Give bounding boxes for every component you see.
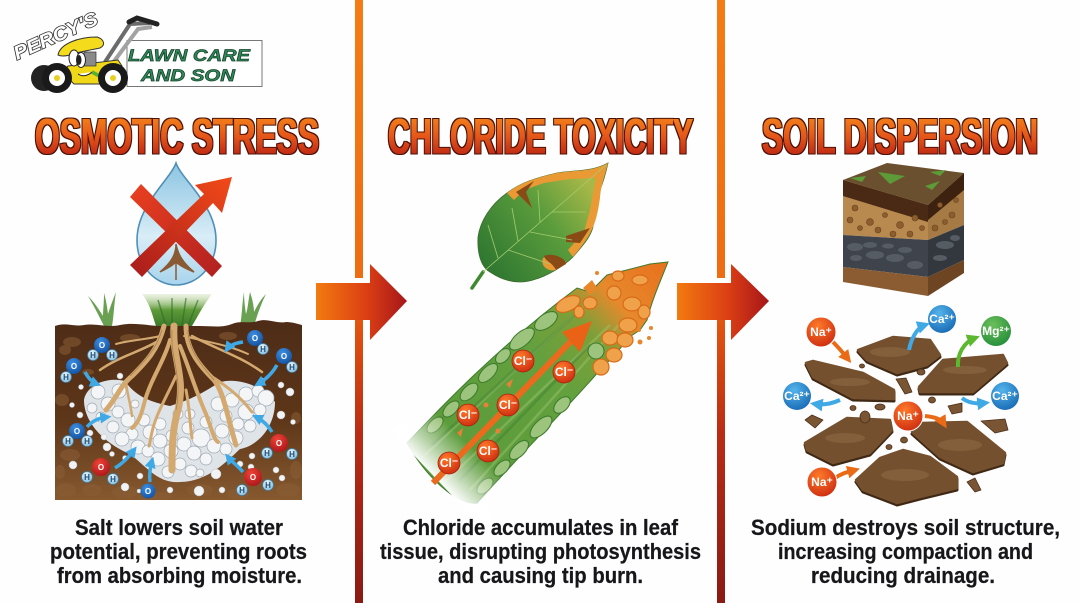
sodium ions: Na⁺	[810, 325, 832, 339]
icon: water drop	[137, 163, 216, 285]
ions	[783, 305, 1019, 497]
icon: crossed water drop with root and arrow	[130, 163, 232, 285]
soil block front face layers	[843, 180, 928, 240]
text block: chloride toxicity: and causing tip burn.	[438, 563, 643, 588]
text block: chloride toxicity	[380, 515, 701, 588]
logo text	[128, 46, 251, 85]
water molecules	[60, 330, 298, 498]
text block: soil dispersion	[751, 515, 1060, 588]
water molecules: H	[260, 345, 266, 354]
panel: osmotic stress	[50, 163, 307, 588]
icon: red cross	[130, 177, 232, 277]
arrow: from panel 2 to panel 3	[677, 264, 769, 340]
logo mower	[31, 18, 157, 93]
text block: osmotic stress	[50, 515, 307, 588]
chloride ions: Cl⁻	[479, 444, 497, 458]
chloride ions: Cl⁻	[499, 398, 517, 412]
water molecules: H	[63, 373, 69, 382]
logo script: Percy's: PERCY'S	[10, 9, 102, 65]
grass above the soil	[88, 292, 266, 326]
divider right	[717, 0, 725, 603]
chloride ions	[438, 350, 575, 474]
small arrows	[457, 379, 513, 437]
water molecules: O	[252, 334, 258, 343]
water molecules: H	[90, 351, 96, 360]
leaf burn patches	[507, 163, 608, 270]
grass blade with cells	[390, 262, 668, 525]
water flow arrows	[85, 342, 277, 482]
water molecules: H	[84, 437, 90, 446]
text block: soil dispersion: increasing compaction and	[778, 539, 1033, 564]
water molecules: O	[71, 362, 77, 371]
plant roots	[100, 326, 262, 470]
logo text: LAWN CARE	[128, 46, 251, 65]
text block: soil dispersion: Sodium destroys soil structure,	[751, 515, 1060, 540]
water molecules: H	[289, 450, 295, 459]
divider left	[355, 0, 363, 603]
chloride ions: Cl⁻	[440, 456, 458, 470]
cell rows	[424, 308, 604, 497]
water molecules: H	[109, 351, 115, 360]
text block: osmotic stress: potential, preventing roots	[50, 539, 307, 564]
soil texture clods	[55, 332, 302, 500]
soil block side face layers	[928, 173, 964, 240]
logo: Percy's Lawn Care and Son	[10, 9, 262, 93]
logo text: AND SON	[140, 66, 236, 85]
calcium ions: Ca²⁺	[929, 312, 955, 326]
chloride ions: Cl⁻	[514, 354, 532, 368]
sodium ions	[806, 317, 923, 497]
blade stripes	[425, 300, 625, 490]
magnesium ion: Mg²⁺	[982, 324, 1010, 338]
leaf veins	[483, 165, 606, 272]
water molecules: H	[239, 486, 245, 495]
soil pebbles and stones	[847, 198, 958, 237]
text block: osmotic stress: Salt lowers soil water	[75, 515, 283, 540]
water molecules: O	[98, 463, 104, 472]
sodium ions: Na⁺	[897, 409, 919, 423]
magnesium ion	[981, 316, 1011, 346]
water molecules: O	[276, 439, 282, 448]
logo box	[127, 40, 262, 86]
sodium ions: Na⁺	[811, 475, 833, 489]
water molecules: O	[99, 341, 105, 350]
water molecules: H	[264, 449, 270, 458]
panel: soil dispersion	[751, 163, 1060, 588]
calcium ions	[783, 305, 1019, 410]
water molecules: H	[289, 363, 295, 372]
ion movement arrows	[815, 325, 985, 478]
water molecules: H	[265, 481, 271, 490]
soil cross-section	[55, 320, 302, 500]
icon: soil block	[843, 163, 964, 296]
chloride ions: Cl⁻	[555, 365, 573, 379]
fade of blade base	[390, 400, 520, 525]
water molecules: O	[145, 487, 151, 496]
icon: damaged leaf	[472, 163, 608, 288]
leaf tip fragments	[583, 271, 653, 344]
panel: chloride toxicity	[380, 163, 701, 588]
text block: soil dispersion: reducing drainage.	[811, 563, 995, 588]
calcium ions: Ca²⁺	[784, 389, 810, 403]
calcium ions: Ca²⁺	[992, 389, 1018, 403]
water molecules: O	[250, 473, 256, 482]
icon: root	[160, 244, 194, 280]
heading: Osmotic Stress: OSMOTIC STRESS	[35, 108, 319, 164]
water molecules: H	[84, 473, 90, 482]
water molecules: H	[110, 475, 116, 484]
chloride ions: Cl⁻	[459, 408, 477, 422]
soil fragments	[805, 337, 1008, 505]
water molecules: O	[281, 352, 287, 361]
water molecules: O	[74, 427, 80, 436]
text block: chloride toxicity: Chloride accumulates in leaf	[403, 515, 679, 540]
water molecules: H	[65, 437, 71, 446]
main transport arrow	[433, 334, 578, 483]
salt crystals	[69, 373, 296, 496]
soil block top	[843, 163, 964, 205]
text block: chloride toxicity: tissue, disrupting photosynthesis	[380, 539, 701, 564]
text block: osmotic stress: from absorbing moisture.	[57, 563, 302, 588]
arrow: from panel 1 to panel 2	[316, 264, 407, 340]
heading: Chloride Toxicity: CHLORIDE TOXICITY	[388, 108, 693, 164]
